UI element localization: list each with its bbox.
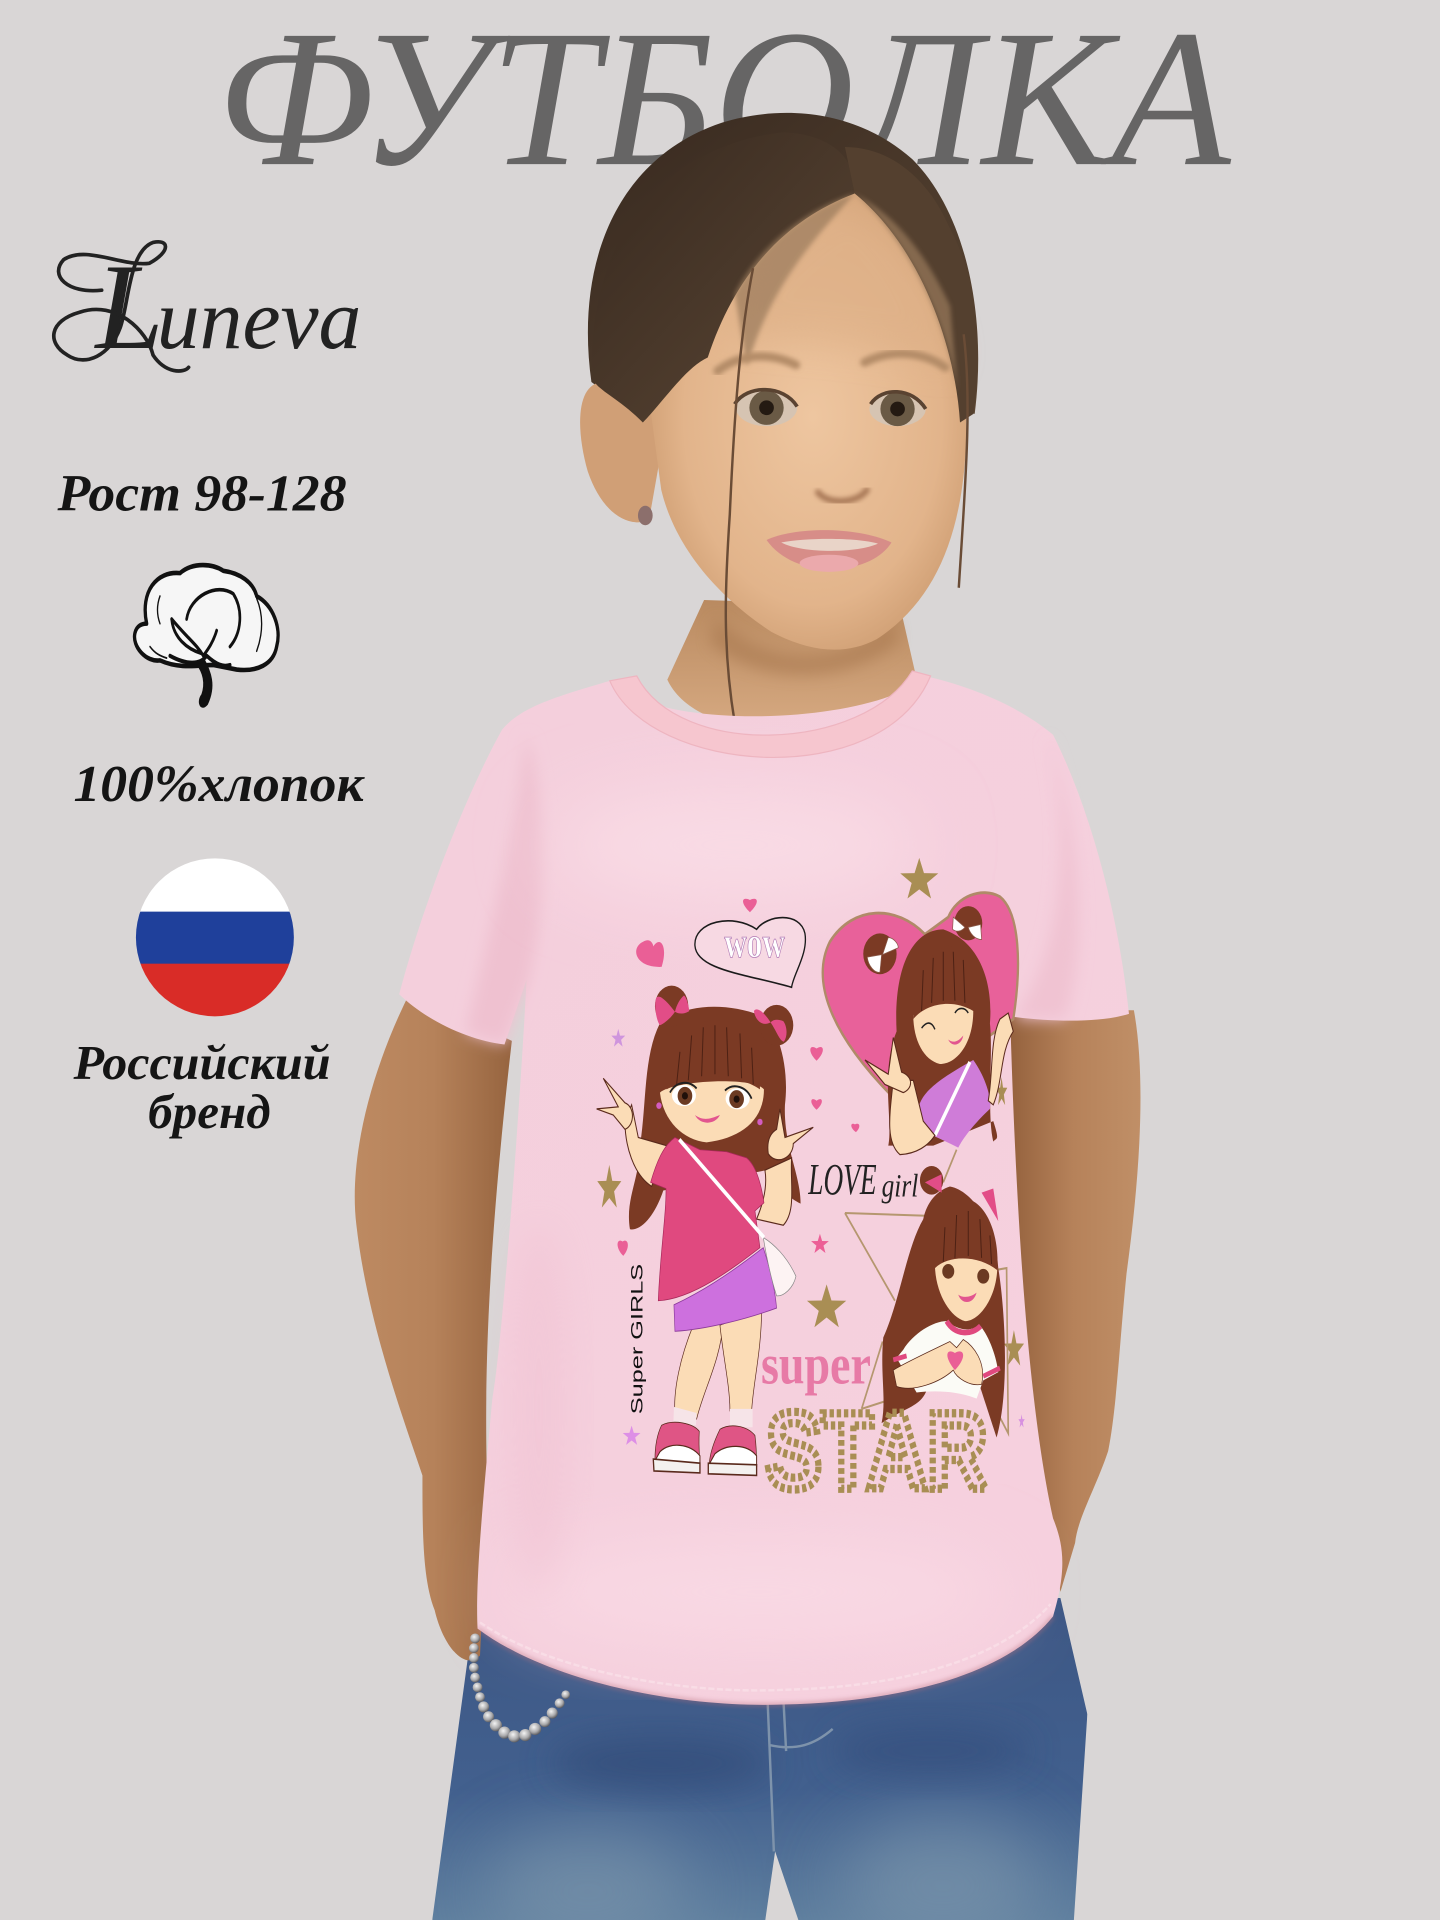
origin label: [72, 1035, 331, 1139]
shirt print: [597, 858, 1025, 1513]
print: decorative stars: [597, 858, 1025, 1445]
fringe highlight: [735, 193, 958, 392]
bead chain: [469, 1633, 570, 1742]
icon: cotton boll: [135, 565, 278, 707]
print: super lettering: super: [761, 1334, 871, 1397]
mouth: [767, 530, 891, 572]
print: star lettering in gold dots: STAR: [766, 1391, 988, 1513]
print: love girl lettering: girl: [882, 1168, 918, 1204]
material label: 100%хлопок: [73, 756, 366, 813]
brand logo: Luneva: [54, 240, 361, 375]
eyebrows: [718, 354, 945, 371]
print: small hearts: [618, 899, 859, 1256]
height range label: Рост 98-128: [57, 466, 347, 523]
forehead shading: [716, 193, 953, 367]
brand logo: Luneva: uneva: [157, 272, 361, 367]
eyes: [735, 389, 926, 426]
print: main girl: [597, 986, 813, 1475]
photo: girl in t-shirt: [355, 113, 1140, 1920]
origin label: Российский: [72, 1035, 331, 1090]
earring: [638, 506, 653, 525]
front hair left sweep: [592, 132, 855, 422]
collar: [610, 671, 931, 757]
print: super girls lettering: Super GIRLS: [628, 1264, 647, 1414]
print: wow speech heart: wow: [724, 920, 786, 967]
t-shirt: [399, 676, 1129, 1705]
neck shadow: [710, 618, 898, 675]
jeans: [416, 1592, 1102, 1920]
face: [646, 184, 966, 650]
print: big heart: [823, 893, 1018, 1101]
print: girl three, lower right: [882, 1166, 1005, 1437]
left arm: [355, 992, 512, 1660]
brand logo: Luneva: L: [96, 240, 164, 375]
print: girl two, upper right: [863, 906, 1013, 1155]
back hair: [588, 113, 978, 416]
hair strands: [726, 268, 968, 722]
print: love girl lettering: LOVE: [808, 1153, 877, 1204]
icon: round Russian flag: [135, 857, 296, 1018]
print: star outline: [845, 1150, 1008, 1433]
front hair right sweep: [845, 147, 978, 422]
print: wow speech heart: [695, 918, 805, 987]
neck: [667, 600, 916, 731]
right arm: [1007, 1010, 1140, 1592]
origin label: бренд: [148, 1084, 271, 1139]
shirt shading: [465, 735, 1078, 1705]
nose: [818, 490, 867, 501]
ear: [580, 382, 667, 522]
